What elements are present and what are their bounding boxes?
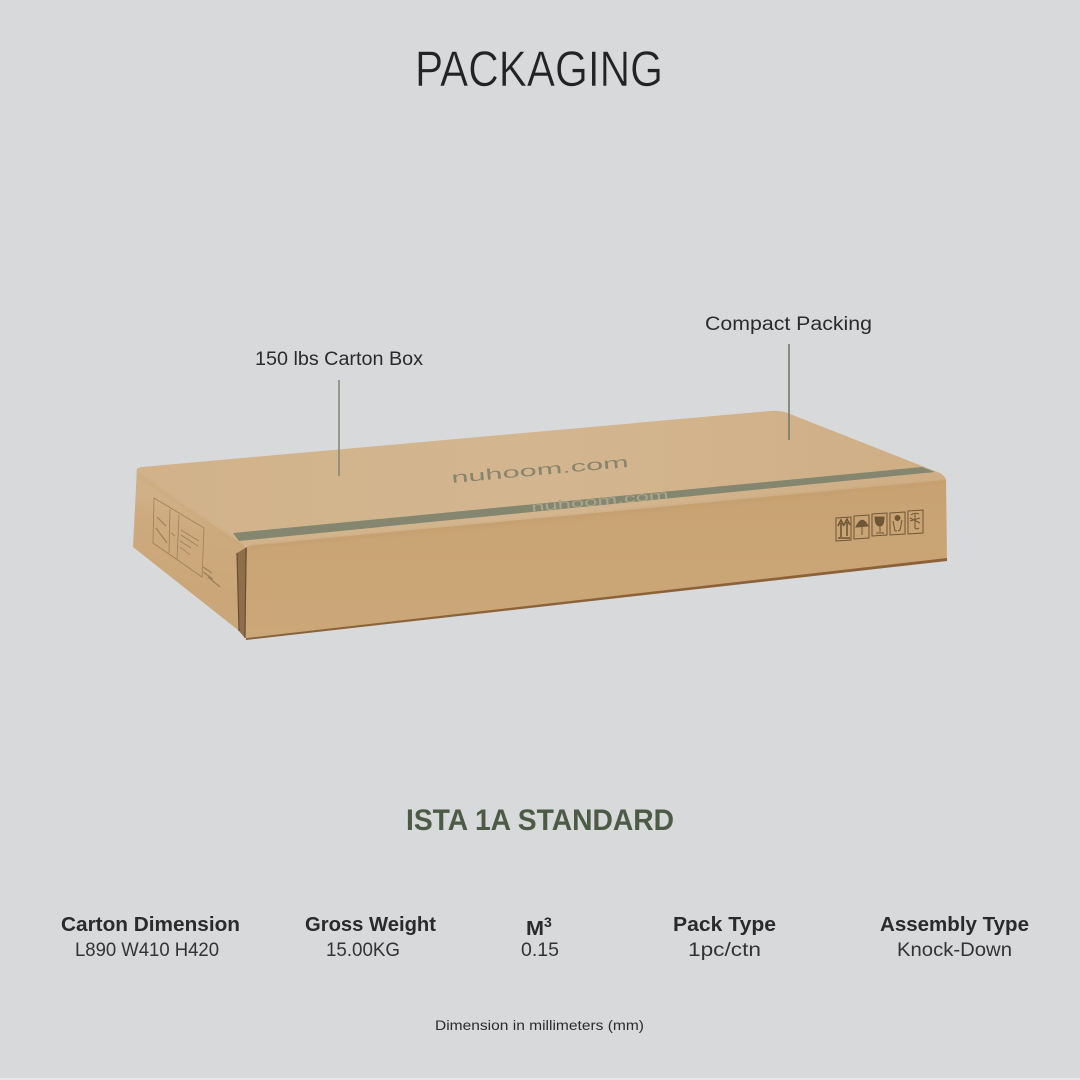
spec: pack type: Pack Type [673, 913, 776, 936]
top logo: nuhoom.com [451, 454, 629, 487]
fold shading on side [137, 474, 240, 545]
icon: this way up [836, 517, 851, 541]
footnote: Dimension in millimeters (mm) [435, 1018, 644, 1033]
spec: cubic metres: M [526, 917, 544, 940]
corner flap [237, 547, 247, 638]
box side face [133, 468, 247, 638]
callout: compact packing: Compact Packing [705, 314, 872, 335]
spec: gross weight: Gross Weight [305, 913, 436, 936]
handling icons [836, 510, 923, 541]
spec: gross weight: 15.00KG [326, 940, 400, 961]
spec: carton dimension [61, 913, 240, 961]
carton box [133, 411, 947, 640]
spec: cubic metres: 0.15 [521, 940, 559, 961]
heading: ISTA 1A standard: ISTA 1A STANDARD [406, 804, 674, 837]
spec: cubic metres: 3 [544, 914, 552, 930]
callout: 150 lbs carton box: 150 lbs Carton Box [255, 349, 424, 370]
spec: pack type [673, 913, 776, 961]
spec: carton dimension: Carton Dimension [61, 913, 240, 936]
icon: keep dry [854, 515, 869, 539]
spec: pack type: 1pc/ctn [688, 940, 761, 961]
side panel print [153, 498, 220, 587]
spec: gross weight [305, 913, 436, 961]
icon: handle with care [890, 512, 905, 535]
bottom edge shadow [246, 558, 947, 640]
box top face [137, 411, 946, 546]
box front face [245, 479, 947, 638]
title: PACKAGING [415, 41, 663, 97]
flap edge [237, 548, 246, 638]
spec: assembly type [880, 913, 1029, 961]
tape strip [233, 467, 935, 541]
spec: carton dimension: L890 W410 H420 [75, 940, 219, 961]
icon: temperature limit [908, 510, 923, 534]
fold shading on front [250, 482, 944, 547]
spec: assembly type: Assembly Type [880, 913, 1029, 936]
icon: fragile [872, 513, 887, 536]
tape logo: nuhoom.com [531, 488, 669, 514]
spec: cubic metres [521, 914, 559, 961]
spec: assembly type: Knock-Down [897, 940, 1012, 961]
